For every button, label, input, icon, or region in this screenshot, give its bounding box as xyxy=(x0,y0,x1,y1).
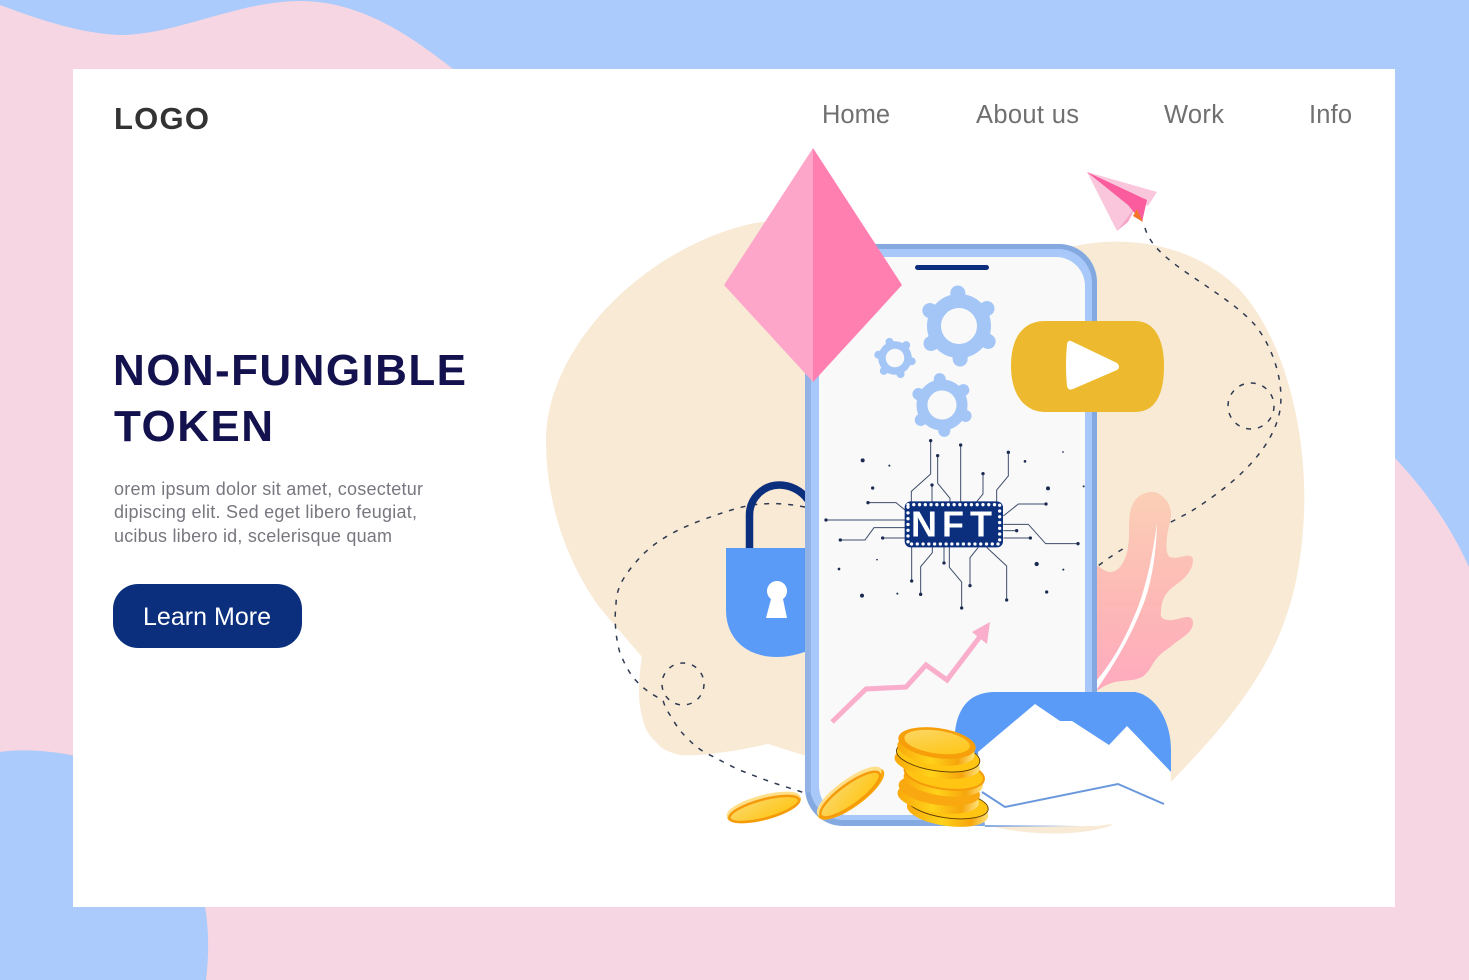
body paragraph: ucibus libero id, scelerisque quam xyxy=(114,526,392,546)
background: pink top-left wave xyxy=(0,1,453,300)
circuit dots xyxy=(824,439,1085,610)
icon: ethereum diamond xyxy=(724,148,902,382)
headline xyxy=(113,346,466,451)
icon: leaf xyxy=(1090,492,1193,690)
cream background blob xyxy=(546,220,1304,833)
navigation: Work xyxy=(1164,101,1224,129)
loose coin: middle xyxy=(810,758,891,828)
body paragraph: orem ipsum dolor sit amet, cosectetur xyxy=(114,479,423,499)
navigation: Home xyxy=(822,101,890,129)
icon: video play button xyxy=(1011,321,1164,412)
icon: small gear xyxy=(876,337,914,379)
loose coin: left xyxy=(724,786,804,829)
rising trend arrow xyxy=(832,622,990,722)
navigation: Info xyxy=(1309,101,1352,129)
icon: large gear xyxy=(929,292,989,360)
coin stack xyxy=(892,723,991,832)
body paragraph: dipiscing elit. Sed eget libero feugiat, xyxy=(114,502,417,522)
chip label: NFT xyxy=(911,504,992,545)
headline: TOKEN xyxy=(114,402,273,451)
navigation xyxy=(822,101,1352,129)
background: pink left column xyxy=(0,60,80,760)
button: learn more: Learn More xyxy=(143,603,271,631)
chip border studs xyxy=(908,505,1000,544)
phone xyxy=(805,244,1097,826)
dashed circle: right xyxy=(1228,383,1274,429)
icon: paper airplane xyxy=(1087,172,1157,231)
headline: NON-FUNGIBLE xyxy=(113,346,466,395)
white page panel xyxy=(73,69,1395,907)
coin 2 xyxy=(892,735,983,784)
dashed flight path: right xyxy=(1098,228,1281,566)
coin 1 xyxy=(895,723,978,770)
button: learn more xyxy=(113,584,302,648)
navigation: About us xyxy=(976,101,1079,129)
background: pink bottom and right wave xyxy=(150,458,1469,980)
body paragraph xyxy=(114,479,423,546)
background: blue bottom-left blob xyxy=(0,750,208,980)
coin 4 xyxy=(895,769,982,819)
NFT chip xyxy=(905,501,1003,547)
dashed circle: left xyxy=(662,663,704,705)
dashed flight path: left xyxy=(615,504,805,793)
logo: LOGO xyxy=(114,101,209,136)
icon: medium gear xyxy=(917,377,967,433)
image card with mountains xyxy=(955,692,1171,827)
coin 3 xyxy=(902,754,986,801)
coin 5 xyxy=(904,784,991,832)
icon: padlock xyxy=(726,485,810,657)
circuit traces xyxy=(826,441,1078,608)
NFT circuit diagram xyxy=(824,439,1085,610)
